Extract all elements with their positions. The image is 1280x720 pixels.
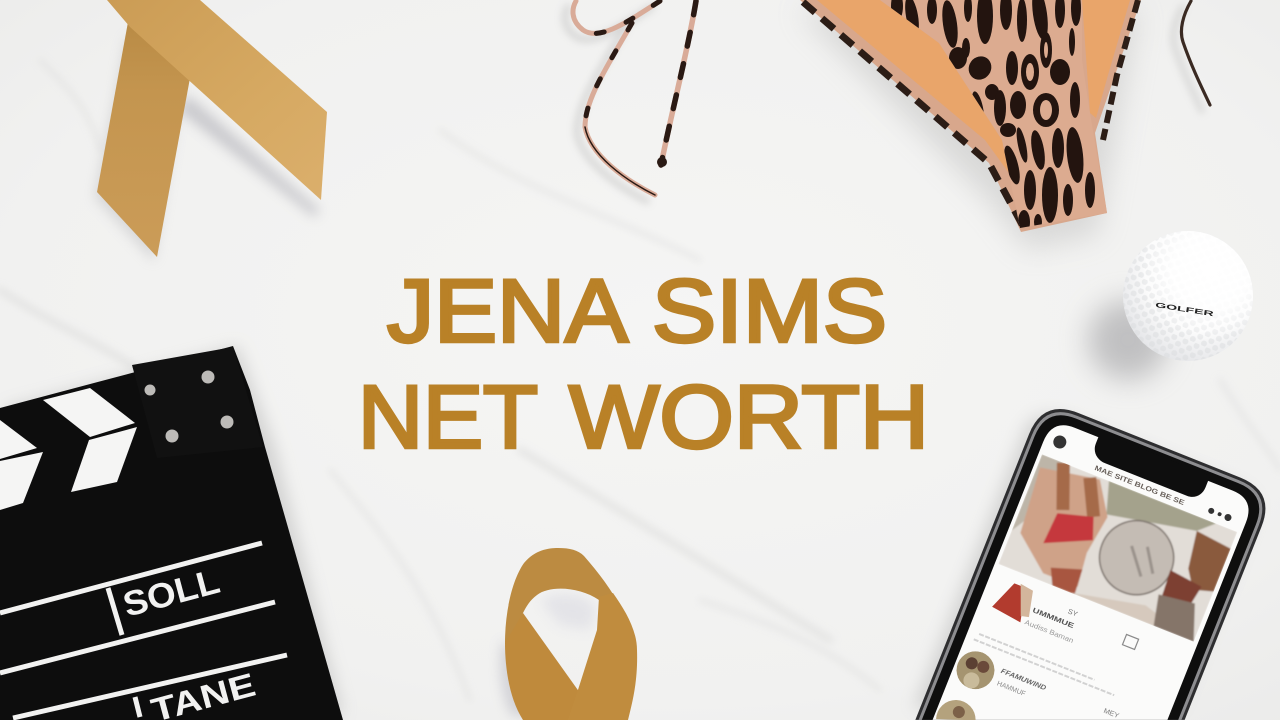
- phone status icons: [1050, 434, 1237, 522]
- list row 1 text: HAMMUF: [996, 680, 1026, 698]
- profile thumbnail: [991, 577, 1039, 625]
- left tie strings: [565, 1, 696, 201]
- bikini outer band: [800, 0, 1141, 232]
- profile name text: [1023, 595, 1084, 645]
- ribbon loop top: [505, 548, 622, 643]
- icon: bookmark outline: [1122, 634, 1139, 649]
- list row 1 text: [995, 668, 1047, 704]
- title word NET: NET: [358, 366, 538, 466]
- avatar 2: [935, 694, 980, 720]
- bikini orange lining: [817, 0, 1014, 180]
- phone frame: [915, 399, 1276, 720]
- icon: leopard print bikini with ties: [565, 0, 1210, 250]
- ribbon right tail: [568, 593, 637, 720]
- list row 2 text: MEY: [1102, 708, 1120, 720]
- profile description text: [974, 633, 1117, 695]
- title word JENA: JENA: [387, 260, 629, 360]
- profile name text: SY: [1066, 608, 1079, 619]
- list row 1 text: FFAMUWIND: [1000, 668, 1047, 692]
- phone photo: beach couple: [998, 454, 1237, 642]
- clapper label SOLL: SOLL: [119, 562, 224, 625]
- clapper field lines: [0, 543, 287, 718]
- bikini leopard panel: [880, 0, 1107, 228]
- icon: golf ball: [1088, 228, 1256, 380]
- clapper stripes: [0, 388, 137, 510]
- phone notch: [1090, 432, 1210, 501]
- icon: gold ribbon, top left: [94, 0, 327, 262]
- profile name text: Audiss Baman: [1023, 619, 1074, 645]
- ribbon left tail: [505, 613, 580, 720]
- title: JENA SIMS NET WORTH: [358, 260, 929, 466]
- right tie string: [1173, 1, 1210, 111]
- icon: movie clapperboard: [0, 346, 343, 720]
- icon: smartphone with social profile: [910, 397, 1276, 720]
- phone header text: MAE SITE BLOG BE SE: [1093, 465, 1186, 507]
- clapper body: [0, 346, 343, 720]
- title word WORTH: WORTH: [569, 366, 929, 466]
- profile name text: UMMMUE: [1031, 607, 1075, 630]
- clapper hinge with rivets: [132, 347, 263, 458]
- title word SIMS: SIMS: [652, 260, 887, 360]
- avatar 1: [956, 651, 994, 690]
- icon: gold awareness ribbon, bottom centre: [500, 548, 637, 720]
- ribbon back leg: [97, 22, 190, 257]
- ribbon front band: [107, 0, 327, 200]
- phone screen: [933, 419, 1255, 720]
- golf ball brand: GOLFER: [1155, 302, 1214, 318]
